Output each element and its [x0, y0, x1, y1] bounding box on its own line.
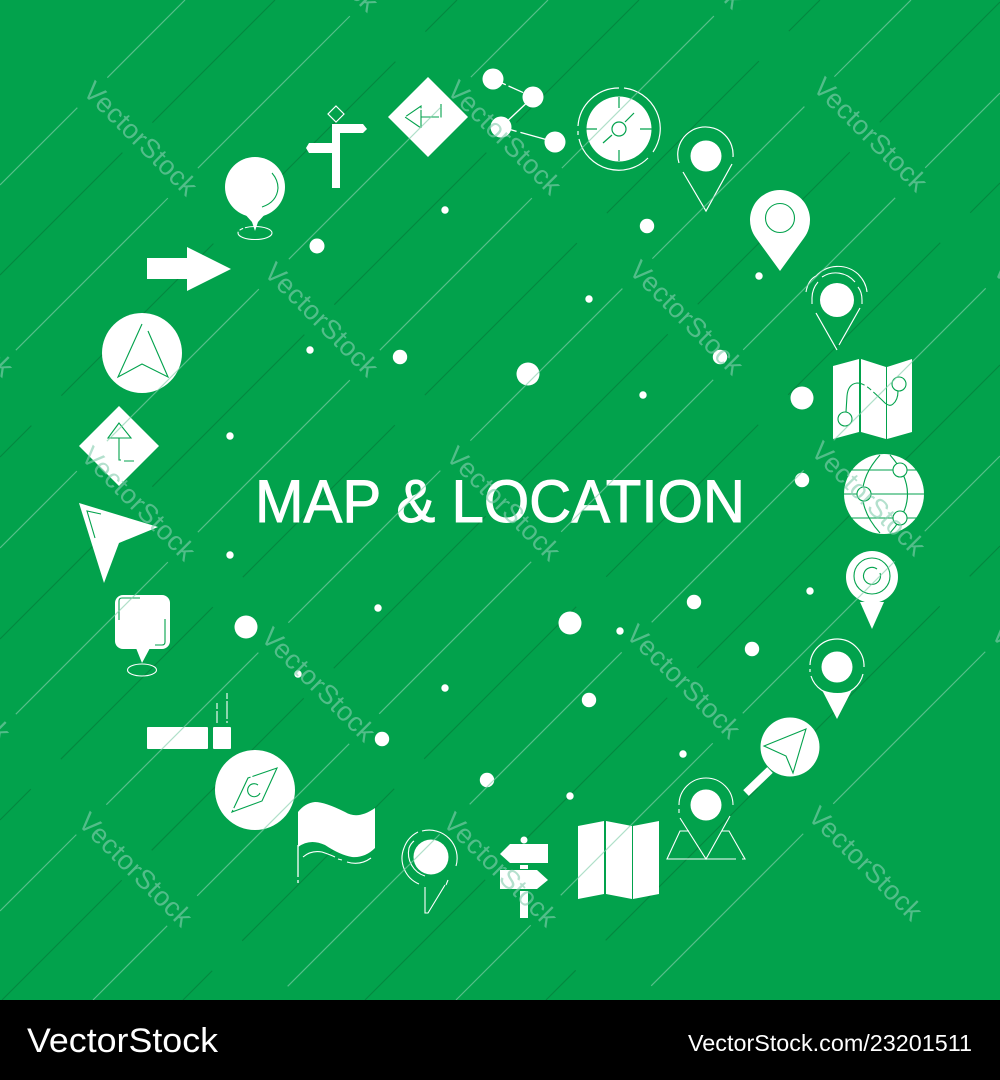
icon: signpost	[306, 106, 367, 188]
watermark pattern: VectorStock	[441, 75, 568, 201]
icon: connected nodes	[482, 68, 566, 152]
icon: compass circle	[215, 750, 295, 830]
footer bar	[0, 1000, 1000, 1080]
watermark pattern: VectorStock	[802, 801, 929, 927]
icon: bubble pin	[402, 830, 457, 913]
icon: solid pin	[750, 190, 810, 271]
icon: pin with arcs	[806, 266, 867, 350]
watermark pattern: VectorStock	[75, 441, 202, 567]
icon: ring pin	[810, 639, 864, 719]
watermark pattern: VectorStock	[255, 622, 382, 748]
icon: diamond up arrow	[79, 406, 159, 486]
icon: pin over mountains	[667, 778, 745, 859]
icon: diamond turn arrow	[388, 77, 468, 157]
scattered dots	[226, 206, 814, 800]
icon: right arrow	[147, 247, 231, 291]
icon: globe with nodes	[844, 454, 924, 534]
icon: magnifier with arrow	[746, 718, 820, 793]
icon: folded map	[578, 821, 659, 899]
footer image id: VectorStock.com/23201511	[688, 1030, 972, 1056]
icon: square pin	[115, 595, 170, 676]
watermark pattern: VectorStock	[620, 619, 747, 745]
icon: target compass	[578, 88, 660, 170]
watermark pattern: VectorStock	[440, 441, 567, 567]
watermark pattern: VectorStock	[72, 807, 199, 933]
title: MAP & LOCATION	[255, 468, 745, 535]
icon: ball pin	[225, 157, 285, 240]
watermark pattern: VectorStock	[623, 255, 750, 381]
watermark pattern: VectorStock	[77, 76, 204, 202]
watermark pattern: VectorStock	[258, 257, 385, 383]
watermark pattern: VectorStock	[805, 436, 932, 562]
icon: navigation cursor	[79, 503, 158, 583]
icon: waving flag	[298, 802, 375, 883]
watermark pattern: VectorStock	[807, 72, 934, 198]
icon: folded map with route	[833, 359, 912, 439]
icon: outline pin	[678, 127, 733, 211]
icon: direction sign	[500, 836, 548, 918]
icon: navigation circle	[102, 313, 182, 393]
icon: concentric pin	[846, 551, 898, 629]
icon: bar with signal lines	[147, 693, 231, 749]
footer logo: VectorStock	[27, 1022, 219, 1060]
watermark pattern: VectorStock	[437, 807, 564, 933]
